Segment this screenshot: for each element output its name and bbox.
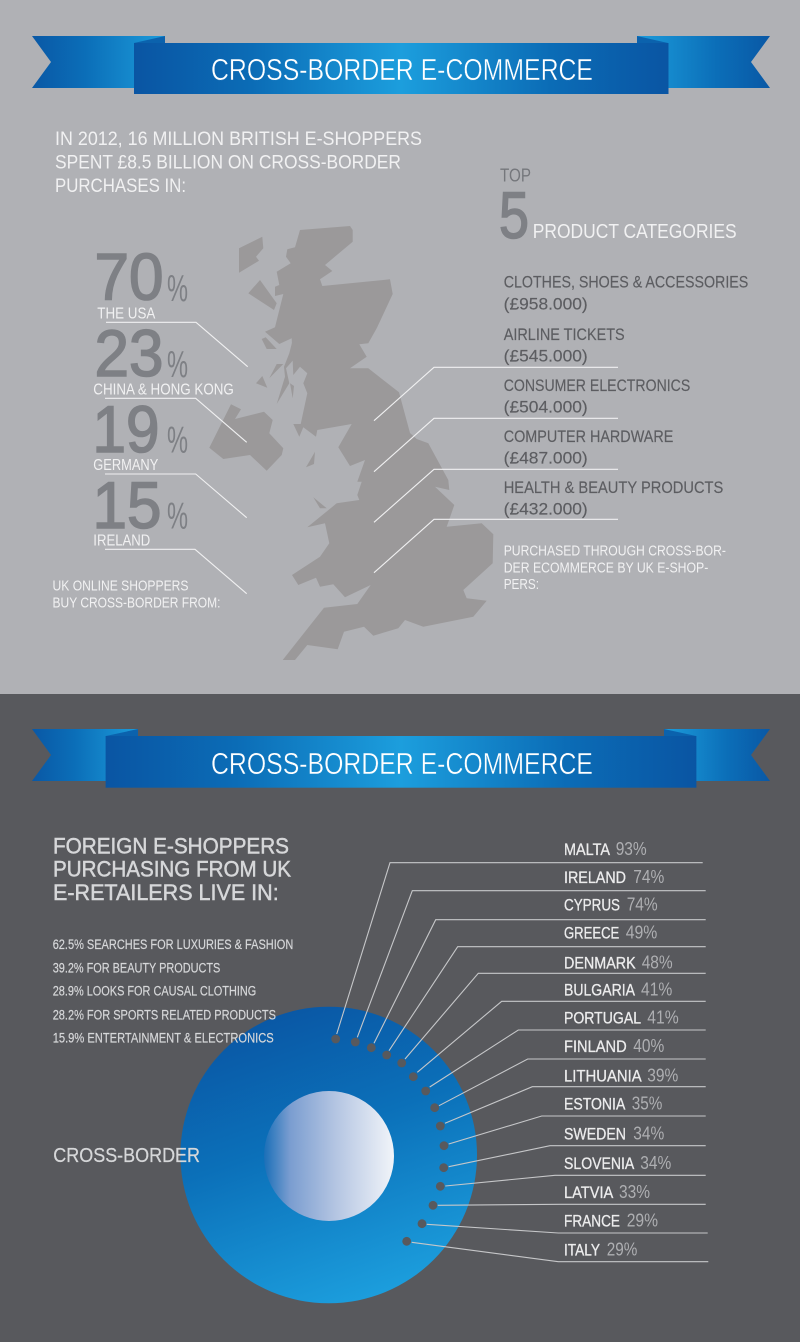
country: Greece: 49% — [626, 923, 657, 943]
list: product interests: 62.5% SEARCHES FOR LUXURIES & FASHION — [53, 937, 293, 952]
stat: Germany 19%: % — [167, 420, 188, 462]
stat: Germany 19%: 19 — [92, 392, 160, 466]
list item: health and beauty products: (£432.000) — [504, 501, 588, 519]
stat: the USA 70%: 70 — [94, 240, 164, 314]
country: Lithuania — [436, 1065, 706, 1130]
text block: intro: SPENT £8.5 BILLION ON CROSS-BORDER — [55, 152, 401, 174]
country: Greece — [382, 923, 706, 1059]
list: product interests: 39.2% FOR BEAUTY PRODUCTS — [53, 960, 220, 975]
country: Bulgaria: 41% — [641, 979, 672, 999]
country: Malta — [331, 839, 703, 1043]
heading: foreign e-shoppers: FOREIGN E-SHOPPERS — [53, 833, 289, 858]
country: Latvia: 33% — [619, 1182, 650, 1202]
list: product interests: 15.9% ENTERTAINMENT & ELECTRONICS — [53, 1031, 274, 1046]
caption: purchased through cross-border — [504, 544, 726, 593]
list item: airline tickets: (£545.000) — [504, 348, 588, 366]
list: product interests — [53, 937, 293, 1046]
list item: health and beauty products: HEALTH & BEAUTY PRODUCTS — [504, 479, 723, 497]
stat: Ireland 15%: 15 — [92, 468, 162, 542]
country: Denmark: 48% — [642, 952, 673, 972]
stat: China and Hong Kong 23% — [93, 316, 247, 442]
country: Malta: 93% — [616, 839, 647, 859]
country: Ireland: 74% — [633, 867, 664, 887]
country: Sweden: SWEDEN — [564, 1125, 626, 1143]
caption: purchased through cross-border: DER ECOMMERCE BY UK E-SHOP- — [504, 560, 708, 576]
country: Slovenia — [436, 1153, 706, 1191]
country: Sweden — [439, 1123, 706, 1172]
list item: airline tickets: AIRLINE TICKETS — [504, 326, 625, 344]
list item: computer hardware — [374, 428, 673, 522]
country: Slovenia: SLOVENIA — [564, 1155, 634, 1173]
map: United Kingdom and Ireland — [209, 226, 493, 660]
country: Latvia: LATVIA — [564, 1184, 613, 1202]
country: Italy: 29% — [607, 1239, 637, 1259]
stat: Ireland 15%: IRELAND — [93, 532, 150, 549]
stat: the USA 70%: THE USA — [97, 305, 156, 322]
stat: Ireland 15%: % — [167, 496, 188, 538]
country: Finland — [430, 1036, 706, 1112]
text block: intro — [55, 128, 422, 197]
country: Portugal — [421, 1007, 706, 1095]
country: Bulgaria — [409, 979, 706, 1081]
country: Denmark — [397, 952, 706, 1067]
heading: foreign e-shoppers: E-RETAILERS LIVE IN: — [53, 880, 279, 905]
heading: top 5 product categories: PRODUCT CATEGORIES — [533, 220, 737, 243]
heading: top 5 product categories: TOP — [500, 166, 531, 186]
stat: Ireland 15% — [92, 468, 247, 594]
text block: intro: PURCHASES IN: — [55, 175, 186, 197]
country: Estonia — [440, 1094, 706, 1150]
country: Lithuania: 39% — [647, 1065, 678, 1085]
panel: foreign shoppers — [0, 694, 800, 1342]
banner: second ribbon — [32, 729, 770, 788]
panel: UK spending — [0, 0, 800, 694]
list item: airline tickets — [374, 326, 625, 421]
country: Italy: ITALY — [564, 1241, 600, 1259]
list item: consumer electronics — [374, 377, 690, 472]
caption: UK online shoppers: UK ONLINE SHOPPERS — [52, 579, 189, 595]
list item: clothes, shoes and accessories: CLOTHES, SHOES & ACCESSORIES — [504, 274, 748, 292]
country: Cyprus — [367, 895, 706, 1052]
caption: UK online shoppers — [52, 579, 220, 611]
country: Ireland — [351, 867, 706, 1046]
chart: concentric circle — [180, 1007, 477, 1303]
heading: top 5 product categories — [499, 166, 737, 252]
heading: top 5 product categories: 5 — [499, 178, 529, 252]
list item: consumer electronics: CONSUMER ELECTRONICS — [504, 377, 690, 395]
country: France: 29% — [627, 1211, 658, 1231]
country: France: FRANCE — [564, 1213, 620, 1231]
country: Estonia: 35% — [632, 1094, 662, 1114]
country: France — [418, 1211, 708, 1233]
stat: China and Hong Kong 23%: % — [167, 344, 188, 386]
caption: purchased through cross-border: PURCHASED THROUGH CROSS-BOR- — [504, 544, 726, 560]
heading: foreign e-shoppers — [53, 833, 291, 905]
stat: Germany 19% — [92, 392, 247, 518]
list item: clothes, shoes and accessories — [504, 274, 748, 313]
country: Estonia: ESTONIA — [564, 1096, 625, 1114]
stat: the USA 70%: % — [167, 268, 188, 310]
country: Finland: 40% — [633, 1036, 664, 1056]
country: Italy — [402, 1237, 708, 1262]
country: Ireland: IRELAND — [564, 869, 626, 887]
country: Denmark: DENMARK — [564, 954, 636, 972]
list item: computer hardware: COMPUTER HARDWARE — [504, 428, 673, 446]
country: Malta: MALTA — [564, 841, 610, 859]
country: Portugal: 41% — [647, 1007, 679, 1027]
title: top banner: CROSS-BORDER E-COMMERCE — [211, 52, 593, 87]
country: Finland: FINLAND — [564, 1038, 627, 1056]
list item: clothes, shoes and accessories: (£958.000) — [504, 295, 588, 313]
country: Bulgaria: BULGARIA — [564, 981, 635, 999]
list item: consumer electronics: (£504.000) — [504, 399, 588, 417]
country: Lithuania: LITHUANIA — [564, 1067, 642, 1085]
stat: China and Hong Kong 23%: CHINA & HONG KONG — [93, 381, 234, 398]
stat: the USA 70% — [94, 240, 248, 367]
country: Greece: GREECE — [564, 925, 619, 943]
heading: foreign e-shoppers: PURCHASING FROM UK — [53, 857, 291, 882]
country: Sweden: 34% — [633, 1123, 664, 1143]
text block: intro: IN 2012, 16 MILLION BRITISH E-SHOPPERS — [55, 128, 422, 150]
stat: Germany 19%: GERMANY — [93, 457, 159, 474]
title: second banner: CROSS-BORDER E-COMMERCE — [211, 746, 593, 781]
caption: UK online shoppers: BUY CROSS-BORDER FROM: — [52, 595, 220, 611]
list: product interests: 28.9% LOOKS FOR CAUSAL CLOTHING — [53, 984, 256, 999]
country: Slovenia: 34% — [640, 1153, 671, 1173]
label: cross-border: CROSS-BORDER — [53, 1144, 200, 1167]
country: Cyprus: 74% — [627, 895, 658, 915]
banner: top ribbon — [32, 36, 770, 94]
country: Portugal: PORTUGAL — [564, 1009, 641, 1027]
list item: computer hardware: (£487.000) — [504, 450, 588, 468]
country: Latvia — [429, 1182, 706, 1210]
list item: health and beauty products — [374, 479, 723, 573]
caption: purchased through cross-border: PERS: — [504, 577, 539, 593]
country: Cyprus: CYPRUS — [564, 897, 620, 915]
list: product interests: 28.2% FOR SPORTS RELATED PRODUCTS — [53, 1007, 276, 1022]
stat: China and Hong Kong 23%: 23 — [94, 316, 164, 390]
